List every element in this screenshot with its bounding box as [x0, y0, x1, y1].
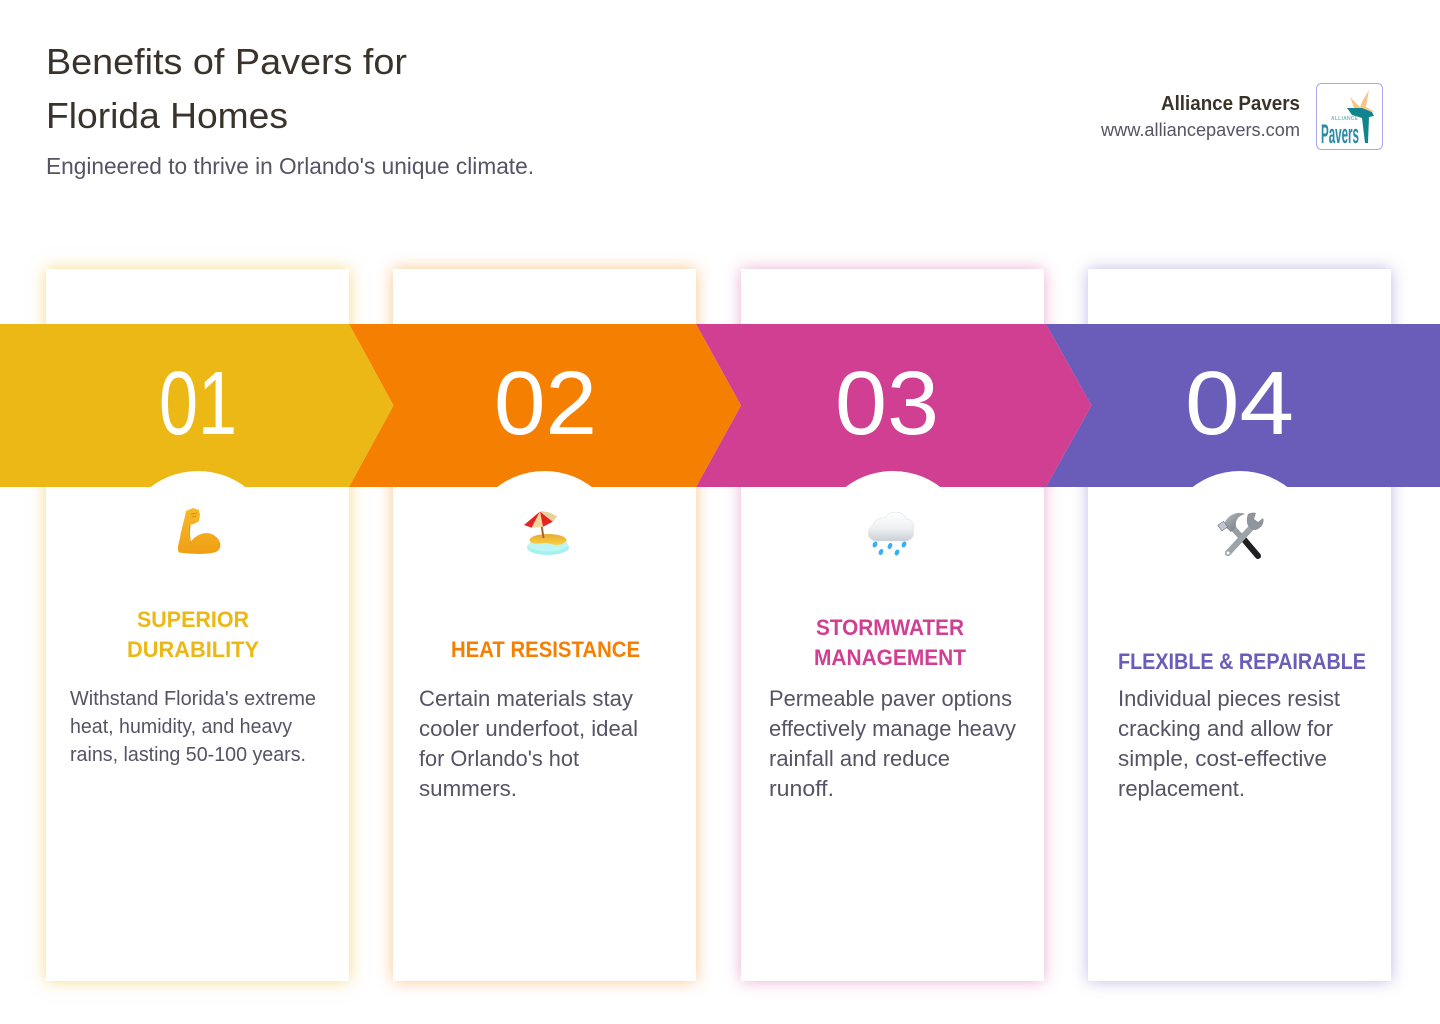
card 2 text: [419, 637, 640, 801]
card 4 text: [1118, 649, 1366, 801]
card 4 body: replacement.: [1118, 776, 1245, 801]
arrow band: [0, 324, 1440, 487]
card 3 body: Permeable paver options: [769, 686, 1012, 711]
subtitle: Engineered to thrive in Orlando's unique climate.: [46, 153, 534, 179]
card 2 body: Certain materials stay: [419, 686, 633, 711]
brand url: www.alliancepavers.com: [1100, 120, 1300, 140]
number 02: 02: [494, 354, 597, 454]
card 3 heading: [814, 615, 967, 670]
icon: flexed biceps: [178, 508, 220, 554]
brand logo: ALLIANCE: [1331, 116, 1359, 122]
icon: cloud with rain: [868, 512, 914, 556]
title: Benefits of Pavers for: [46, 41, 407, 82]
card 4 body: simple, cost-effective: [1118, 746, 1327, 771]
card 3 body: runoff.: [769, 776, 834, 801]
panel: card 2 background: [393, 269, 696, 981]
arrow 4: [1046, 324, 1440, 487]
title: Florida Homes: [46, 95, 288, 136]
card 3 body: [769, 686, 1016, 801]
brand logo: [1316, 84, 1382, 150]
number 03: 03: [835, 354, 939, 454]
card 4 body: cracking and allow for: [1118, 716, 1333, 741]
number 04: 04: [1185, 354, 1294, 454]
card 1 heading: SUPERIOR: [137, 607, 249, 632]
header: title and subtitle: [46, 41, 534, 179]
card 4 body: [1118, 686, 1340, 801]
card 1 body: heat, humidity, and heavy: [70, 716, 292, 738]
icon backdrops: [120, 471, 1318, 627]
title: [46, 41, 407, 136]
card 2 body: cooler underfoot, ideal: [419, 716, 638, 741]
icon: beach umbrella on island: [524, 511, 569, 555]
card 3 body: effectively manage heavy: [769, 716, 1016, 741]
card 2 heading: HEAT RESISTANCE: [451, 637, 640, 662]
panel: card 3 background: [741, 269, 1044, 981]
brand name: Alliance Pavers: [1161, 93, 1300, 115]
card 2 body: for Orlando's hot: [419, 746, 579, 771]
brand logo: Pavers: [1321, 119, 1359, 149]
arrow 1: [0, 324, 394, 487]
card 1 body: rains, lasting 50-100 years.: [70, 744, 306, 766]
card 1 heading: DURABILITY: [127, 637, 259, 662]
card 4 body: Individual pieces resist: [1118, 686, 1340, 711]
arrow 2: [349, 324, 741, 487]
card 3 text: [769, 615, 1016, 801]
step numbers: [159, 354, 1294, 454]
card 1 body: Withstand Florida's extreme: [70, 688, 316, 710]
card 2 body: [419, 686, 638, 801]
brand block: [1100, 84, 1382, 150]
icon: hammer and wrench: [1218, 513, 1264, 556]
panel: card 1 background: [46, 269, 349, 981]
card 1 heading: [127, 607, 259, 662]
arrow 3: [696, 324, 1092, 487]
number 01: 01: [159, 354, 237, 454]
card 3 heading: MANAGEMENT: [814, 645, 967, 670]
card 1 body: [70, 688, 316, 766]
card 3 heading: STORMWATER: [816, 615, 964, 640]
card 3 body: rainfall and reduce: [769, 746, 950, 771]
card 2 body: summers.: [419, 776, 517, 801]
card 4 heading: FLEXIBLE & REPAIRABLE: [1118, 649, 1366, 674]
card 1 text: [70, 607, 316, 766]
panel: card 4 background: [1088, 269, 1391, 981]
